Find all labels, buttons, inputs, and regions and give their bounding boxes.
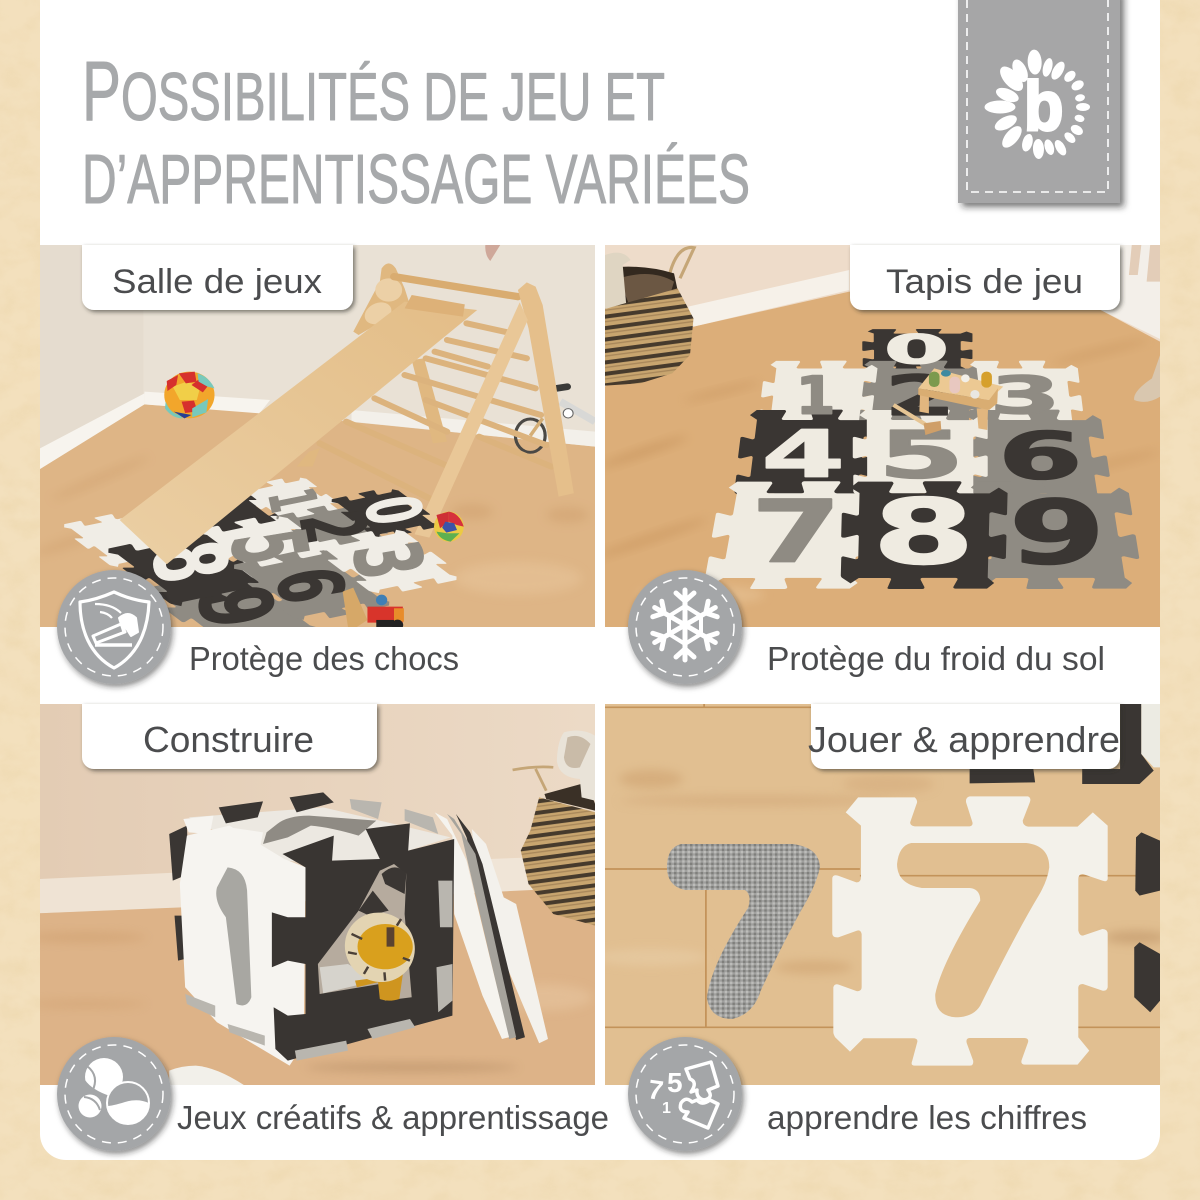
leaning wooden ramp — [120, 295, 477, 564]
puzzle mat in perspective — [57, 474, 466, 652]
icon: numbers and puzzle pieces: 7 — [646, 1074, 665, 1106]
tab: Construire: Construire — [143, 719, 314, 760]
grey foam number 7 — [667, 844, 820, 1019]
mat digits: 5 — [878, 418, 964, 493]
mat digits: 0 — [884, 326, 949, 373]
dark mat pieces — [970, 704, 1160, 1012]
wall and floor — [26, 704, 595, 1086]
plush lion — [344, 912, 415, 1001]
rungs — [320, 277, 552, 498]
dark front face — [272, 823, 454, 1061]
tab: Jouer & apprendre — [808, 704, 1120, 769]
floor — [33, 392, 595, 627]
mat digits: 9 — [175, 578, 296, 635]
mat digits — [153, 488, 424, 624]
woven basket and plush — [513, 730, 595, 926]
wall and floor — [593, 245, 1160, 627]
mat digits: 3 — [990, 366, 1061, 426]
mat digits: 8 — [129, 533, 250, 590]
icon: shield with hammer — [80, 592, 149, 668]
foam number mat — [702, 326, 1144, 589]
mat digits: 8 — [872, 480, 975, 585]
woven basket — [605, 247, 694, 386]
mat digits: 9 — [1009, 482, 1105, 585]
title — [82, 44, 750, 218]
wooden climbing triangle — [297, 263, 574, 538]
tab: Salle de jeux — [82, 245, 353, 310]
icon: numbers and puzzle pieces — [646, 1062, 718, 1128]
wall — [40, 245, 595, 469]
caption: shock protection: Protège des chocs — [189, 640, 459, 677]
second ball — [434, 512, 464, 542]
wooden hammer bench toy — [894, 368, 1003, 435]
icon: balls — [78, 1058, 149, 1124]
icon: numbers and puzzle pieces: 5 — [667, 1067, 683, 1098]
icon: snowflake — [650, 590, 720, 660]
face opening — [318, 864, 412, 1001]
mat digits: 6 — [256, 560, 363, 610]
mat digits: 0 — [348, 490, 438, 530]
mat digits: 2 — [885, 365, 956, 428]
title: D’APPRENTISSAGE VARIÉES — [82, 140, 750, 218]
hand at top — [485, 245, 500, 261]
white play mat in front — [169, 1066, 245, 1086]
caption: learn numbers: apprendre les chiffres — [767, 1099, 1087, 1136]
tab: Tapis de jeu: Tapis de jeu — [886, 263, 1083, 301]
back frame — [353, 263, 443, 431]
mat digits: 4 — [761, 416, 845, 492]
crib corner and plush paw — [1101, 245, 1160, 402]
tab: Jouer & apprendre: Jouer & apprendre — [808, 719, 1120, 760]
connector tabs — [169, 792, 438, 961]
mat digits: 6 — [998, 418, 1083, 494]
caption: cold protection: Protège du froid du sol — [767, 640, 1105, 677]
icon: numbers and puzzle pieces: 1 — [662, 1100, 671, 1117]
badge: cold protection — [628, 570, 742, 684]
tab: Construire — [82, 704, 377, 769]
foam cube — [169, 792, 454, 1066]
tab: Salle de jeux: Salle de jeux — [112, 263, 322, 301]
tab: Tapis de jeu — [850, 245, 1120, 310]
stacked mats — [435, 812, 548, 1043]
mat digits — [751, 326, 1105, 585]
front A-frame — [518, 282, 574, 497]
panel: Construire photo — [26, 704, 595, 1086]
toy ball — [164, 372, 215, 418]
panel: Salle de jeux photo — [33, 245, 595, 652]
grey tabs on the sides and bottom — [185, 881, 452, 1061]
logo tag — [958, 0, 1120, 203]
panel: Jouer & apprendre photo — [594, 704, 1168, 1086]
wooden floor — [594, 704, 1168, 1086]
caption: creative play: Jeux créatifs & apprentissage — [177, 1099, 609, 1136]
white foam tile with 7 cut-out — [832, 796, 1108, 1066]
cube top — [189, 807, 451, 864]
badge: learn numbers — [628, 1037, 742, 1151]
mat digits: 3 — [331, 534, 444, 586]
balance bike — [515, 387, 595, 452]
mat digits: 5 — [207, 521, 331, 572]
white side face — [180, 826, 306, 1066]
mat digits: 7 — [751, 483, 841, 583]
wooden crane and toy car — [343, 588, 404, 630]
mat digits: 1 — [796, 366, 835, 426]
badge: shock protection — [57, 570, 171, 684]
icon: sunflower petals logo — [984, 49, 1090, 159]
panel: Tapis de jeu photo — [593, 245, 1160, 627]
mat digits: 1 — [253, 483, 331, 518]
mat digits: 2 — [278, 504, 384, 550]
badge: creative play — [57, 1037, 171, 1151]
title: POSSIBILITÉS DE JEU ET — [82, 44, 665, 138]
icon: sunflower petals logo: b — [1024, 68, 1063, 146]
